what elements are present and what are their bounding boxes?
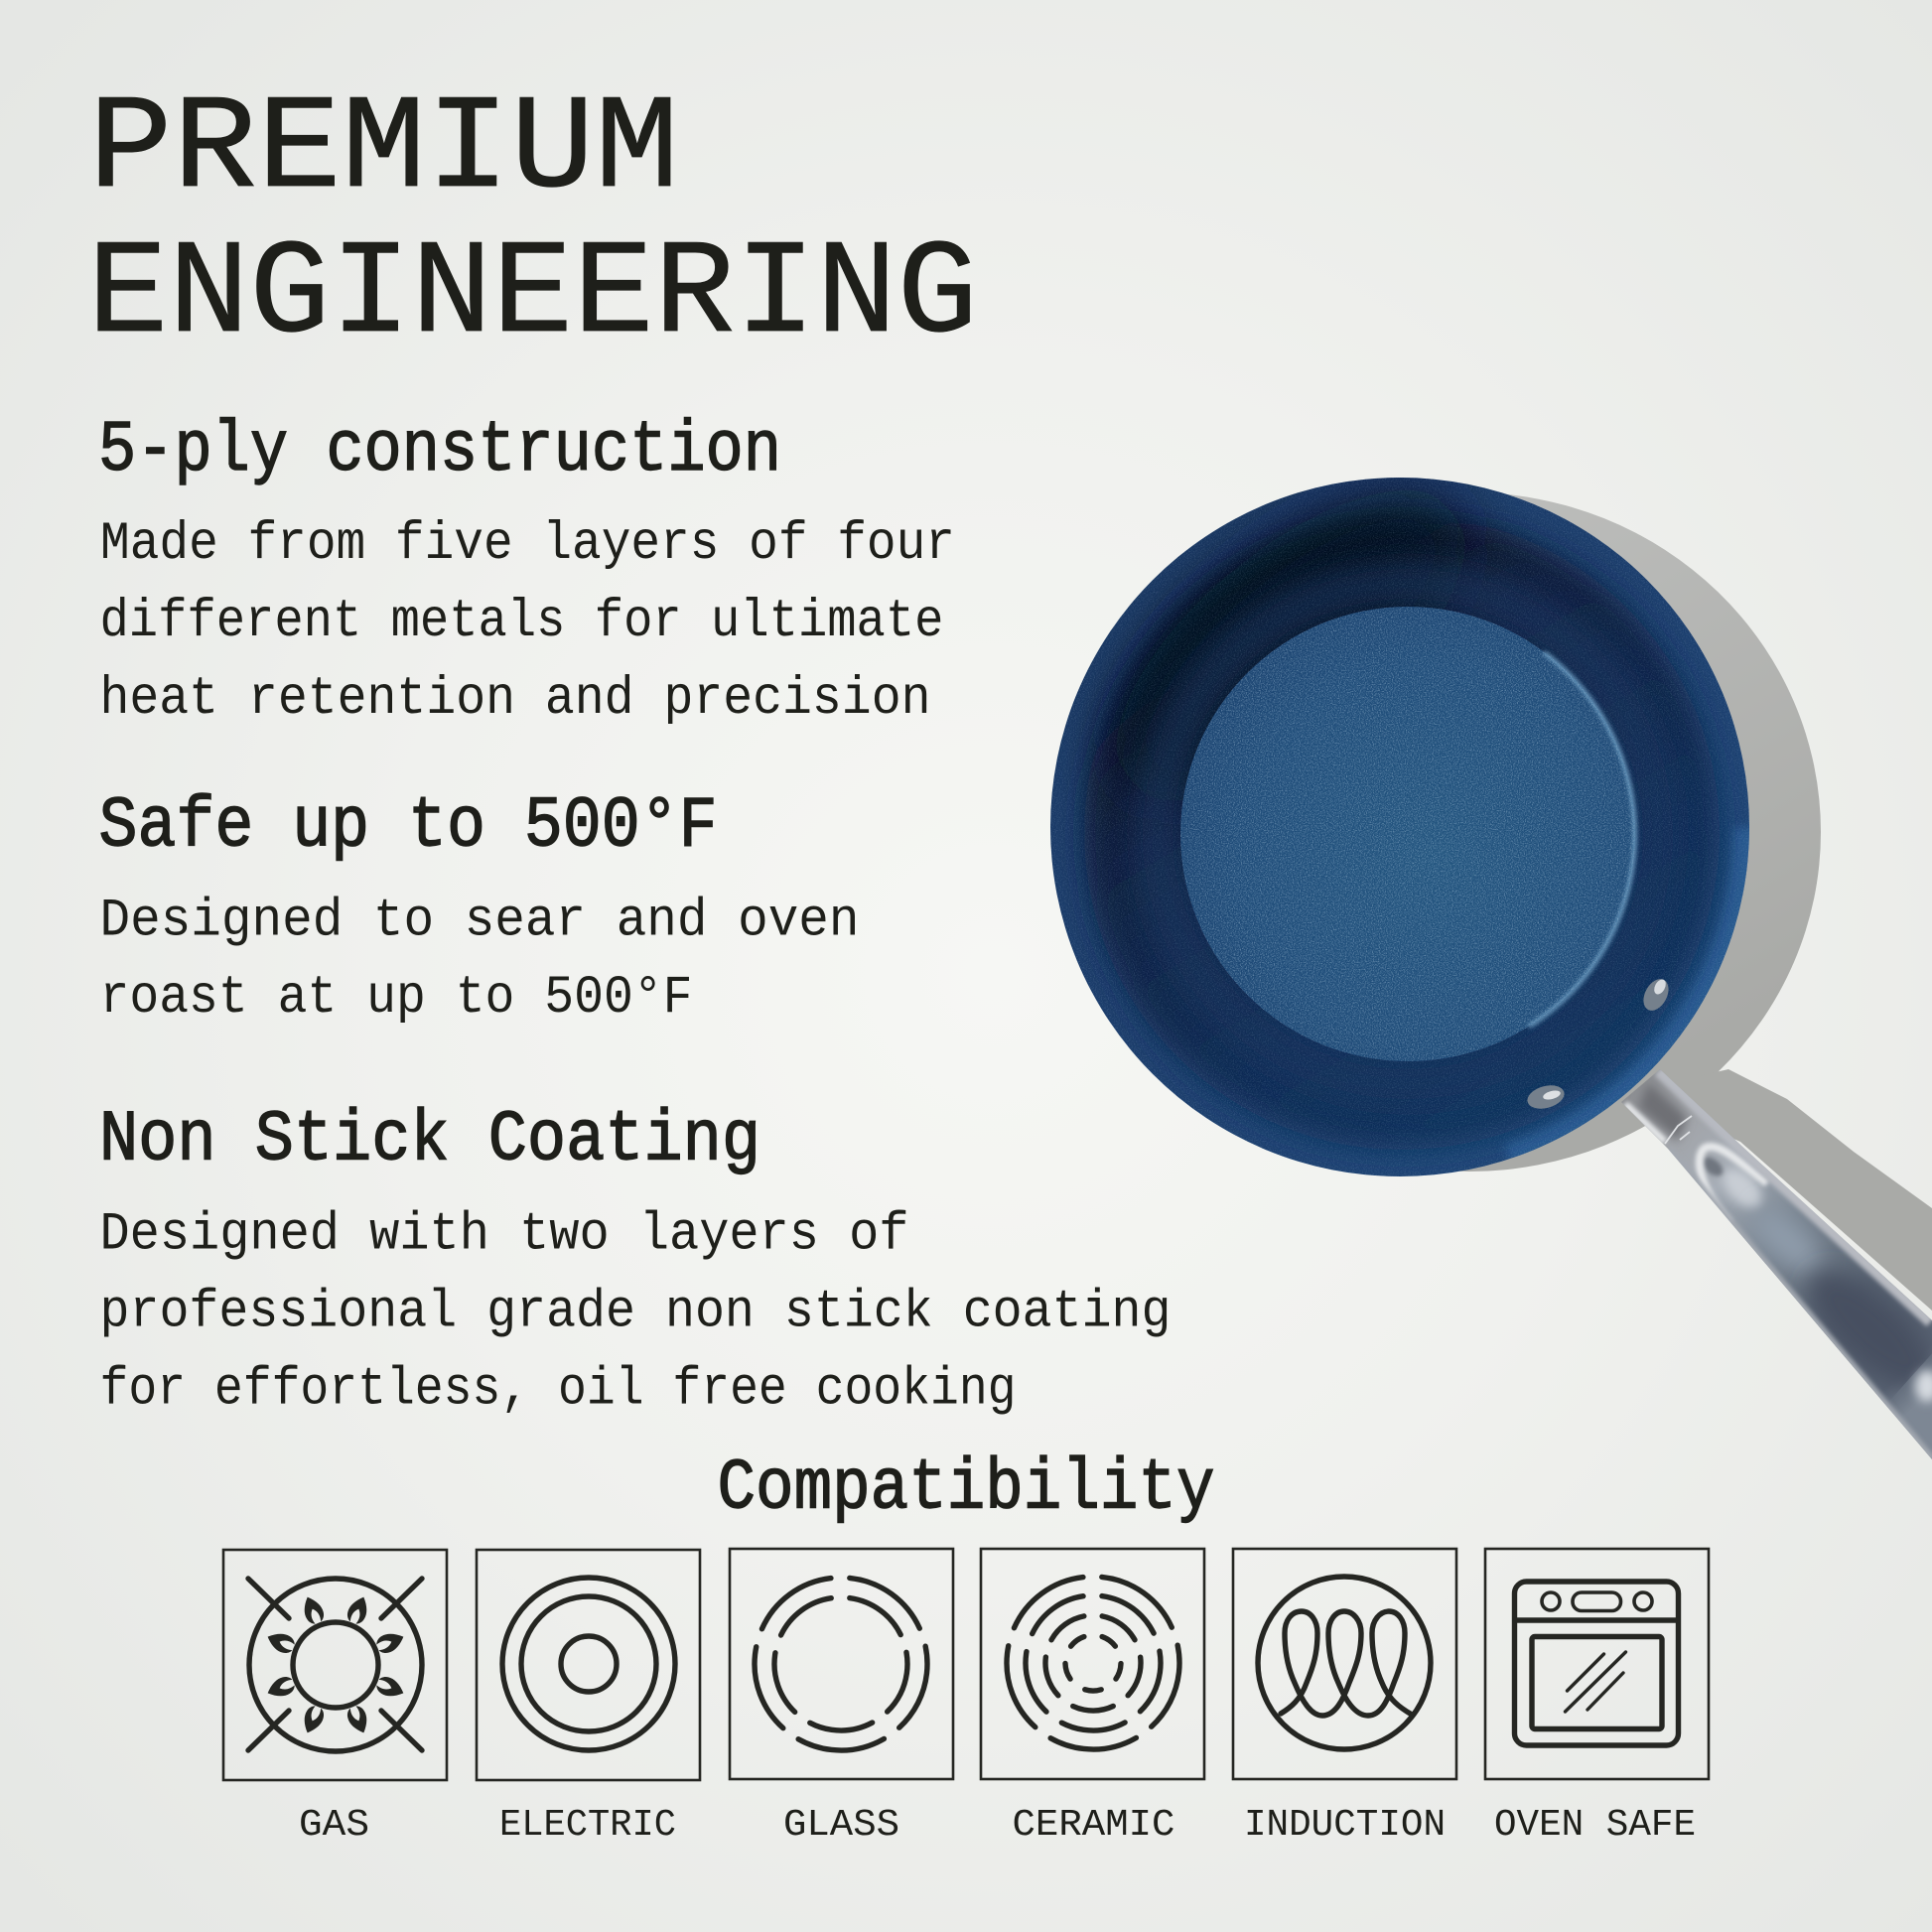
handle logo mark xyxy=(1665,1116,1692,1144)
text block: 5-ply construction: different metals for ultimate xyxy=(99,592,943,652)
text block: safe up to 500F xyxy=(99,786,860,1029)
text block: non stick coating: Designed with two layers of xyxy=(99,1205,909,1265)
title: ENGINEERING xyxy=(87,219,978,371)
text block: 5-ply construction: 5-ply construction xyxy=(98,410,781,491)
pan body xyxy=(1050,436,1749,1176)
pan rivets xyxy=(1525,975,1674,1113)
glass label: GLASS xyxy=(783,1804,899,1847)
text block: 5-ply construction: Made from five layers of four xyxy=(100,514,955,575)
text block: non stick coating: for effortless, oil free cooking xyxy=(99,1360,1017,1420)
ceramic icon xyxy=(981,1549,1204,1779)
electric icon xyxy=(477,1550,700,1780)
text block: non stick coating: Non Stick Coating xyxy=(99,1100,760,1181)
glass icon xyxy=(730,1549,953,1779)
text block: 5-ply construction xyxy=(98,410,955,730)
title xyxy=(87,74,978,371)
electric label: ELECTRIC xyxy=(499,1804,676,1847)
title: PREMIUM xyxy=(88,74,679,226)
ceramic label: CERAMIC xyxy=(1013,1804,1175,1847)
text block: safe up to 500F: Designed to sear and oven xyxy=(99,892,860,951)
induction icon xyxy=(1233,1549,1456,1779)
compatibility heading: Compatibility xyxy=(717,1448,1215,1529)
text block: non stick coating xyxy=(99,1100,1172,1420)
text block: safe up to 500F: Safe up to 500°F xyxy=(99,786,717,868)
gas label: GAS xyxy=(299,1804,369,1847)
induction label: INDUCTION xyxy=(1244,1804,1446,1847)
text block: non stick coating: professional grade non stick coating xyxy=(99,1283,1172,1342)
oven safe label: OVEN SAFE xyxy=(1494,1804,1696,1847)
pan handle xyxy=(1621,1069,1932,1459)
gas icon xyxy=(223,1550,447,1780)
text block: 5-ply construction: heat retention and precision xyxy=(99,669,931,730)
oven safe icon xyxy=(1485,1549,1709,1779)
pan shadow xyxy=(1118,492,1932,1311)
text block: safe up to 500F: roast at up to 500°F xyxy=(99,968,693,1029)
